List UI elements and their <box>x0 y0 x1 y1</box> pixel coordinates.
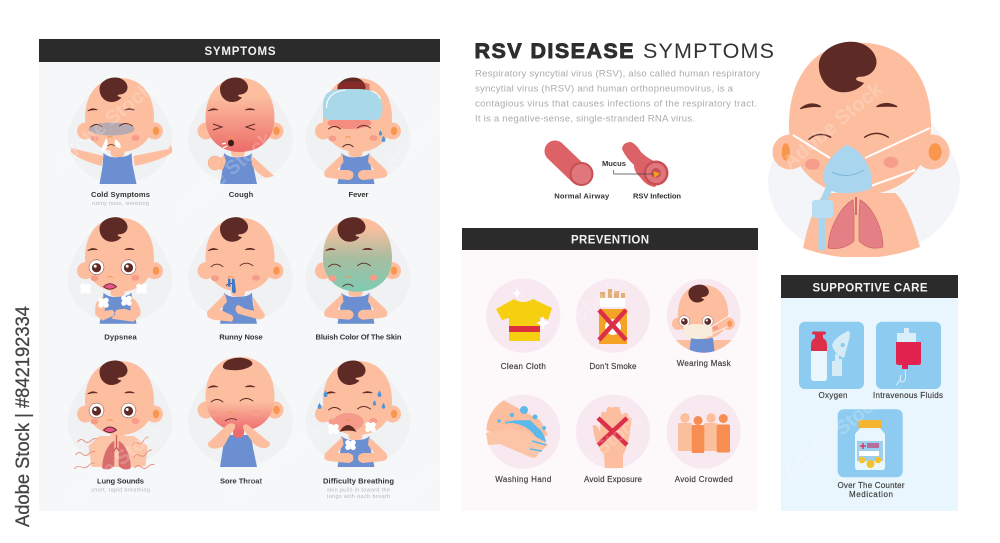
label: difficulty breathing: lungs with each breath <box>327 494 390 500</box>
intro text: Respiratory syncytial virus (RSV), also called human respiratory <box>475 69 760 80</box>
watermarks: Adobe Stock <box>49 78 158 174</box>
label: over the counter medication <box>838 481 905 499</box>
label: clean cloth: Clean Cloth <box>501 362 546 371</box>
label: runny nose: Runny Nose <box>219 333 263 342</box>
icon: clean cloth <box>486 279 560 353</box>
mucus callout: Mucus <box>602 159 626 168</box>
symptoms header <box>39 39 440 62</box>
mask straps <box>793 128 930 187</box>
label: cold symptoms: Cold Symptoms <box>91 190 150 199</box>
label: cold symptoms <box>91 190 150 207</box>
baby: dypsnea <box>68 217 172 324</box>
icon: avoid exposure <box>576 395 650 469</box>
watermarks: Adobe Stock <box>549 248 658 344</box>
label: bluish color of the skin: Bluish Color Of The Skin <box>316 333 402 342</box>
label: lung sounds: Lung Sounds <box>97 477 144 486</box>
label: over the counter medication: Medication <box>849 490 893 499</box>
label: lung sounds <box>91 477 150 494</box>
label: cough: Cough <box>229 190 254 199</box>
baby body <box>803 193 920 258</box>
watermarks: Adobe Stock <box>169 128 278 224</box>
watermarks: Adobe Stock <box>384 418 493 514</box>
baby: fever <box>306 77 410 184</box>
panel: supportive care <box>781 275 958 511</box>
watermarks <box>49 78 888 514</box>
intro text: It is a negative-sense, single-stranded RNA virus. <box>475 114 695 125</box>
label: difficulty breathing: skin pulls in toward the <box>327 487 390 493</box>
label: cold symptoms: runny nose, sneezing <box>92 201 149 207</box>
intro text <box>475 69 760 125</box>
icon: washing hand <box>486 395 560 469</box>
baby: cold symptoms <box>68 77 172 184</box>
mucus callout <box>602 159 653 174</box>
icon: oxygen <box>799 322 864 389</box>
baby: runny nose <box>188 217 293 324</box>
prevention header: PREVENTION <box>571 235 649 247</box>
diagram: rsv infection airway <box>622 142 681 200</box>
title <box>474 39 774 63</box>
icon: don't smoke <box>576 279 650 353</box>
baby: difficulty breathing <box>306 360 410 467</box>
diagram: rsv infection airway: RSV Infection <box>633 192 681 200</box>
supportive care background <box>781 298 958 511</box>
label: difficulty breathing: Difficulty Breathing <box>323 477 394 486</box>
icon: wearing mask <box>667 279 741 355</box>
big blob <box>768 122 960 243</box>
label: fever: Fever <box>348 190 369 199</box>
diagram: normal airway: Normal Airway <box>554 192 610 200</box>
label: oxygen: Oxygen <box>818 391 848 400</box>
baby: cough <box>188 77 293 184</box>
symptoms header: SYMPTOMS <box>204 46 276 58</box>
icon: over the counter medication <box>838 409 903 477</box>
symptoms panel background <box>39 62 440 511</box>
panel: symptoms <box>39 39 440 511</box>
baby head <box>772 42 950 195</box>
label: dypsnea: Dypsnea <box>104 333 138 342</box>
intro text: contagious virus that causes infections of the respiratory tract. <box>475 99 757 110</box>
label: don't smoke: Don't Smoke <box>590 362 637 371</box>
prevention background <box>462 250 758 511</box>
prevention header <box>462 228 758 250</box>
label: sore throat: Sore Throat <box>220 477 262 486</box>
baby: sore throat <box>188 357 293 467</box>
icon: intravenous fluids <box>876 322 941 389</box>
supportive care header: SUPPORTIVE CARE <box>812 282 928 294</box>
label: avoid exposure: Avoid Exposure <box>584 475 643 484</box>
icon: avoid crowded <box>667 395 741 469</box>
baby: lung sounds <box>68 360 172 469</box>
stock id label: Adobe Stock | #842192334 <box>13 306 34 527</box>
label: difficulty breathing <box>323 477 394 500</box>
watermarks: Adobe Stock <box>379 78 488 174</box>
supportive care header <box>781 275 958 298</box>
oxygen tube <box>812 186 833 250</box>
baby with oxygen mask <box>768 42 960 258</box>
panel: prevention <box>462 228 758 511</box>
baby: bluish color of the skin <box>306 217 410 324</box>
lungs <box>828 197 883 249</box>
intro text: syncytial virus (hRSV) and human orthopneumovirus, is a <box>475 84 734 95</box>
label: avoid crowded: Avoid Crowded <box>675 475 733 484</box>
watermarks: Adobe Stock <box>59 418 168 514</box>
watermarks: Adobe Stock <box>219 418 328 514</box>
watermarks: Adobe Stock <box>779 78 888 174</box>
diagram: normal airway <box>554 151 610 200</box>
label: washing hand: Washing Hand <box>495 475 551 484</box>
oxygen mask <box>823 145 872 193</box>
watermarks: Adobe Stock <box>779 388 888 484</box>
title: SYMPTOMS <box>643 39 774 63</box>
title: RSV DISEASE <box>474 39 634 63</box>
label: wearing mask: Wearing Mask <box>677 359 732 368</box>
label: intravenous fluids: Intravenous Fluids <box>873 391 943 400</box>
label: over the counter medication: Over The Counter <box>838 481 905 490</box>
watermarks: Adobe Stock <box>539 408 648 504</box>
label: lung sounds: short, rapid breathing <box>91 488 150 494</box>
